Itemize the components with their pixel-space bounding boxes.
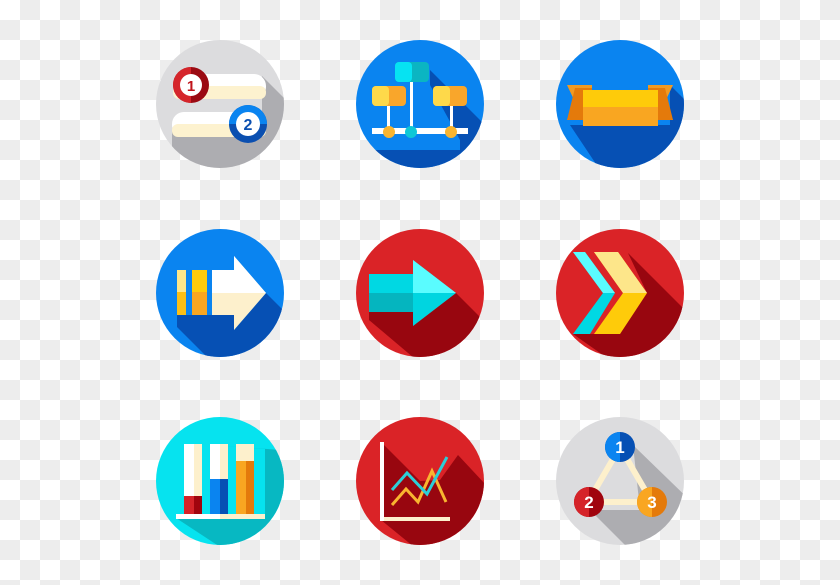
icon: numbered list: 1 [187, 78, 195, 95]
icon: line chart (red) [356, 417, 484, 545]
icon: cyan arrow (red) [356, 229, 484, 357]
icon: chevrons [556, 229, 684, 357]
icon: bar chart (cyan) [156, 417, 284, 545]
icon: numbered triangle: 1 [615, 438, 625, 457]
icon: numbered triangle: 3 [647, 493, 657, 512]
icon: numbered list [156, 40, 284, 168]
icon: arrow with bars (blue) [156, 229, 284, 357]
icon: numbered triangle [556, 417, 684, 545]
icon: numbered triangle: 2 [584, 493, 594, 512]
icon: ribbon banner [556, 40, 684, 168]
icon: numbered list: 2 [244, 117, 253, 134]
icon: hierarchy [356, 40, 484, 168]
